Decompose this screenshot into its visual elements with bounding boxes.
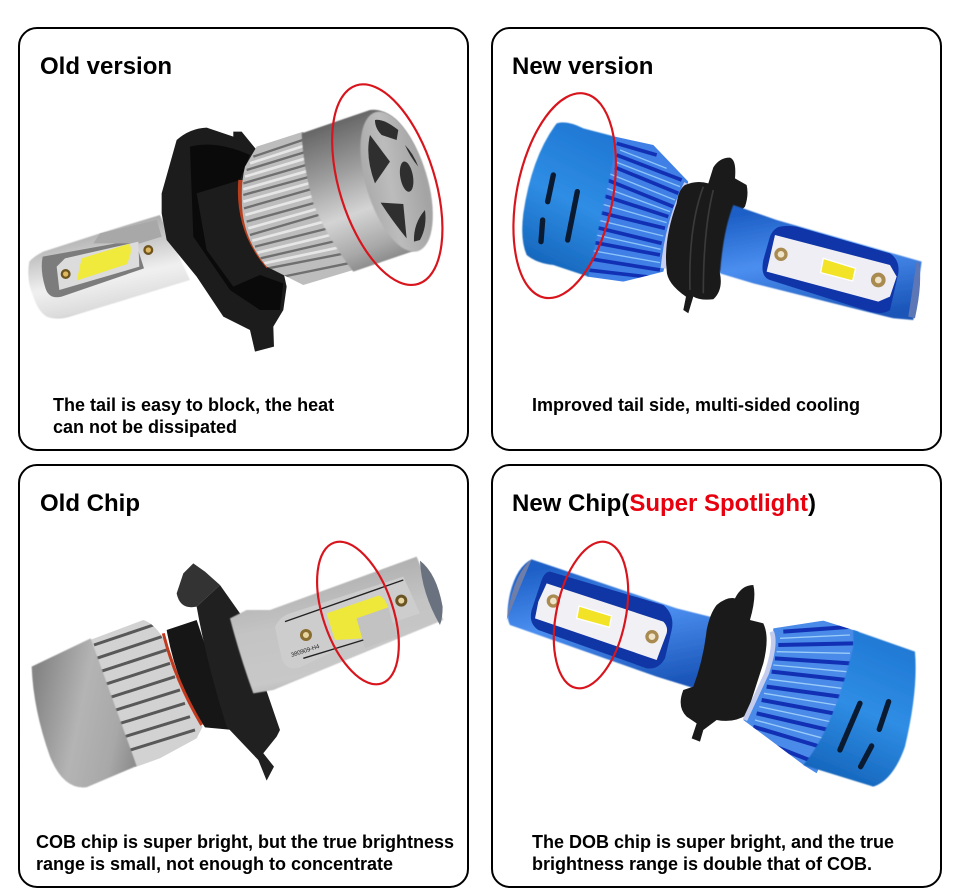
- collar: [681, 585, 767, 742]
- heading: new version: New version: [512, 53, 653, 80]
- tail cap: [302, 110, 429, 272]
- red highlight ellipse: [542, 535, 640, 695]
- caption: can not be dissipated: [53, 417, 237, 437]
- fins: [91, 620, 202, 767]
- illustration: silver bulb with COB chip: [32, 531, 443, 788]
- caption: brightness range is double that of COB.: [532, 854, 872, 874]
- tail slots: [541, 175, 577, 242]
- red highlight ellipse: [311, 71, 464, 298]
- fins: [242, 132, 352, 285]
- panel: old chip: [19, 465, 468, 887]
- panel: new version: [492, 28, 941, 450]
- tail openings: [368, 120, 426, 242]
- fins: [744, 620, 859, 774]
- red ring: [163, 633, 202, 725]
- caption: Improved tail side, multi-sided cooling: [532, 395, 860, 415]
- illustration: silver bulb with blocked tail: [28, 71, 464, 352]
- panel: new chip: [492, 465, 941, 887]
- tail cap: [803, 630, 916, 787]
- caption: The DOB chip is super bright, and the true: [532, 832, 894, 852]
- illustration: blue bulb with DOB chip: [507, 535, 916, 787]
- red highlight ellipse: [301, 531, 415, 695]
- red highlight ellipse: [497, 84, 632, 307]
- caption: [36, 832, 454, 874]
- panel: old version: [19, 28, 468, 450]
- tube: [720, 205, 922, 320]
- collar: [666, 158, 748, 313]
- tail disc: [420, 561, 443, 625]
- tail cap: [522, 122, 615, 277]
- illustration: blue bulb with vented tail: [497, 84, 922, 320]
- LED chip: [327, 596, 388, 640]
- tail cap: [32, 638, 137, 788]
- caption: [532, 832, 894, 874]
- caption: range is small, not enough to concentrate: [36, 854, 393, 874]
- tube: [507, 559, 717, 690]
- heading: new chip super spotlight: New Chip(Super Spotlight): [512, 490, 816, 517]
- tube: [28, 215, 190, 319]
- tail slots: [840, 702, 889, 767]
- caption: COB chip is super bright, but the true brightness: [36, 832, 454, 852]
- LED chip: [577, 606, 612, 627]
- part number: 380909-H4: [290, 644, 321, 659]
- LED chip: [821, 258, 856, 281]
- flange: [162, 128, 287, 352]
- red ring: [240, 180, 268, 267]
- fins: [588, 136, 688, 282]
- heading: old chip: Old Chip: [40, 490, 140, 517]
- heading: old version: Old version: [40, 53, 172, 80]
- caption: The tail is easy to block, the heat: [53, 395, 334, 415]
- LED chip: [77, 244, 131, 281]
- light ring: [663, 183, 687, 268]
- flange and knob: [177, 563, 220, 607]
- caption: [53, 395, 334, 437]
- tube: [230, 557, 443, 693]
- light ring: [745, 632, 773, 720]
